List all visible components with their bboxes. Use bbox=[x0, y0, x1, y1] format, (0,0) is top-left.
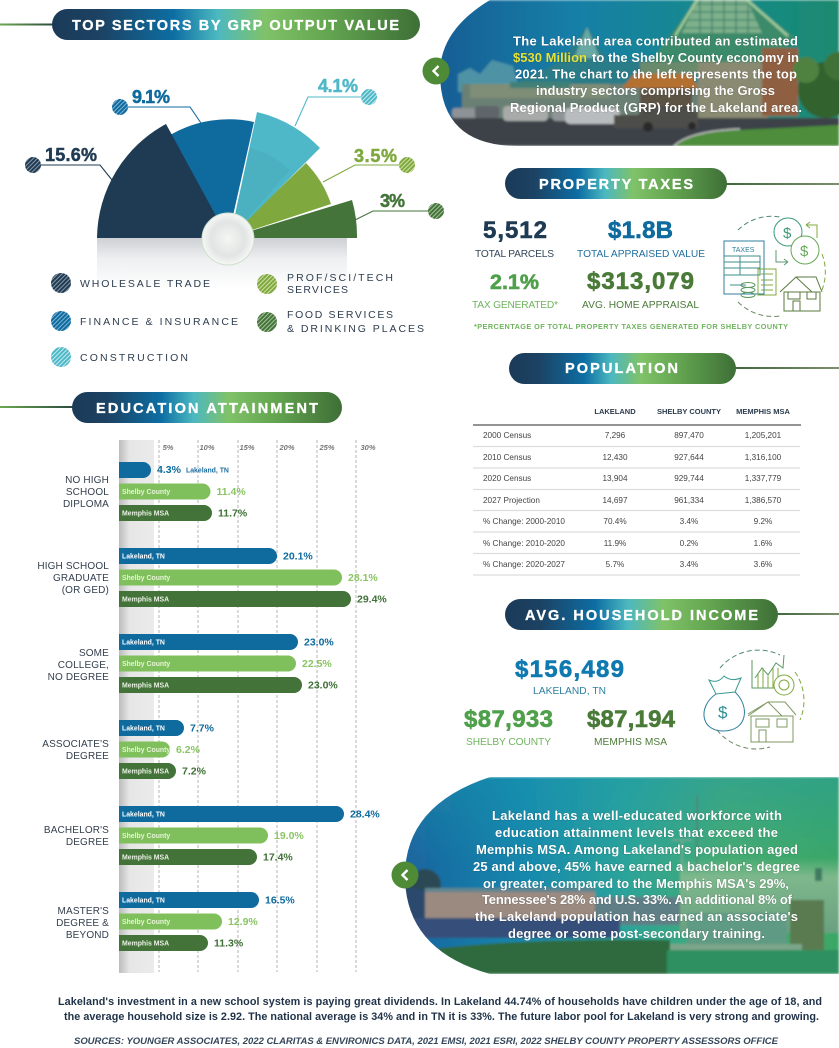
group: master's degree and beyond: 11.3% bbox=[214, 938, 244, 950]
icon: taxes document, coins and house: TAXES bbox=[732, 247, 755, 254]
row: 2020 census: 13,904 bbox=[602, 474, 628, 483]
icon: money bag, chart and house bbox=[704, 650, 804, 749]
row: 2000 census: 897,470 bbox=[674, 431, 704, 440]
group: master's degree and beyond: Lakeland, TN bbox=[122, 898, 165, 904]
driveway and grass bbox=[410, 918, 620, 938]
row: 2020 census: 929,744 bbox=[674, 474, 704, 483]
group: high school graduate: Memphis MSA bbox=[122, 596, 169, 604]
row: 2027 projection: 2027 Projection bbox=[483, 496, 540, 505]
row: change 2020-2027: 3.6% bbox=[754, 560, 772, 569]
group: master's degree and beyond bbox=[56, 892, 295, 951]
row: 2000 census: 7,296 bbox=[605, 431, 626, 440]
stat: Lakeland income: $156,489 bbox=[515, 656, 624, 683]
row: 2000 census bbox=[483, 431, 782, 440]
stat: Shelby County income: SHELBY COUNTY bbox=[466, 737, 551, 748]
value: 15.6% bbox=[25, 145, 97, 173]
group: no high school diploma: DIPLOMA bbox=[63, 499, 109, 510]
group: master's degree and beyond: Shelby County bbox=[122, 919, 170, 926]
heading: average household income bbox=[505, 599, 839, 630]
stat: Shelby County income bbox=[464, 706, 553, 748]
value: 3.5% bbox=[354, 146, 415, 173]
row: change 2010-2020: % Change: 2010-2020 bbox=[483, 539, 565, 548]
banner text: The Lakeland area contributed an estimated bbox=[513, 34, 798, 48]
sector: professional services bbox=[228, 163, 331, 238]
distant rooflines bbox=[458, 60, 520, 92]
icon: back chevron button bbox=[422, 58, 450, 84]
row: 2010 census: 2010 Census bbox=[483, 453, 531, 462]
legend: finance and insurance: FINANCE & INSURANCE bbox=[80, 316, 238, 328]
group: some college bbox=[48, 634, 338, 693]
row: 2027 projection: 14,697 bbox=[602, 496, 628, 505]
group: no high school diploma: NO HIGH bbox=[65, 475, 109, 486]
group: bachelor's degree: DEGREE bbox=[66, 837, 109, 848]
group: master's degree and beyond: MASTER'S bbox=[58, 906, 109, 917]
sources line: SOURCES: YOUNGER ASSOCIATES, 2022 CLARITAS & ENVIRONICS DATA, 2021 EMSI, 2021 ESRI, 2022 SHELBY COUNTY PROPERTY ASSESSORS OFFICE bbox=[74, 1036, 779, 1047]
group: some college: 23.0% bbox=[308, 680, 338, 692]
group: high school graduate: Shelby County bbox=[122, 575, 170, 582]
banner text: Tennessee's 28% and U.S. 33%. An additional 8% of bbox=[482, 892, 793, 907]
heading: top sectors by GRP output value: TOP SECTORS BY GRP OUTPUT VALUE bbox=[72, 18, 399, 34]
group: no high school diploma: Lakeland, TN bbox=[186, 468, 229, 474]
banner text: Memphis MSA. Among Lakeland's population aged bbox=[476, 842, 798, 857]
group: high school graduate: GRADUATE bbox=[53, 573, 109, 584]
legend: professional services: PROF/SCI/TECH bbox=[287, 272, 393, 284]
banner text bbox=[473, 808, 800, 941]
group: bachelor's degree: 19.0% bbox=[274, 830, 304, 842]
storefront strip bbox=[462, 84, 702, 120]
group: bachelor's degree: Shelby County bbox=[122, 833, 170, 840]
row: 2027 projection: 1,386,570 bbox=[745, 496, 782, 505]
sector: food services bbox=[228, 200, 357, 238]
group: bachelor's degree: BACHELOR'S bbox=[44, 825, 109, 836]
leader lines bbox=[33, 97, 436, 220]
group: no high school diploma: 4.3% bbox=[157, 464, 182, 476]
value: 4.1% bbox=[318, 76, 377, 105]
banner text: or greater, compared to the Memphis MSA's 29%, bbox=[483, 876, 789, 891]
group: associate's degree: 7.7% bbox=[190, 722, 215, 734]
row: change 2000-2010: 9.2% bbox=[754, 517, 772, 526]
stat: average home appraisal bbox=[582, 268, 699, 311]
legend: finance and insurance bbox=[51, 311, 238, 331]
row: 2020 census bbox=[483, 474, 782, 483]
value: 3.5%: 3.5% bbox=[354, 146, 397, 166]
group: associate's degree: DEGREE bbox=[66, 751, 109, 762]
heading: education attainment: EDUCATION ATTAINMENT bbox=[96, 401, 318, 417]
stat: Memphis MSA income: $87,194 bbox=[587, 706, 676, 733]
axis labels: 10% bbox=[199, 443, 215, 452]
row: change 2020-2027: 5.7% bbox=[606, 560, 624, 569]
row: 2010 census bbox=[483, 453, 782, 462]
icon: back chevron button bbox=[392, 862, 418, 888]
closing paragraph: Lakeland's investment in a new school system is paying great dividends. In Lakeland 44.74% of households have children under the age of 18, and bbox=[58, 996, 822, 1008]
legend bbox=[51, 272, 424, 367]
stat: total parcels: TOTAL PARCELS bbox=[475, 249, 554, 260]
brick sign bbox=[790, 900, 824, 950]
banner text: Regional Product (GRP) for the Lakeland area. bbox=[510, 100, 802, 115]
icon: taxes document, coins and house bbox=[724, 216, 825, 316]
group: high school graduate: 20.1% bbox=[283, 550, 313, 562]
radial sector chart bbox=[25, 76, 444, 290]
row: change 2010-2020 bbox=[483, 539, 772, 548]
axis labels: 15% bbox=[239, 443, 255, 452]
photo banner: education workforce bbox=[390, 777, 839, 974]
group: bachelor's degree: Lakeland, TN bbox=[122, 812, 165, 818]
row: change 2000-2010 bbox=[483, 517, 772, 526]
table column headers bbox=[594, 407, 790, 416]
group: associate's degree: 7.2% bbox=[182, 766, 207, 778]
stat: Lakeland income: LAKELAND, TN bbox=[533, 686, 606, 697]
axis labels: 25% bbox=[318, 443, 335, 452]
legend: food services: & DRINKING PLACES bbox=[287, 323, 424, 335]
sector: construction bbox=[230, 112, 320, 238]
group: some college: Memphis MSA bbox=[122, 682, 169, 690]
group: some college: NO DEGREE bbox=[48, 672, 109, 683]
sector: finance and insurance bbox=[170, 119, 254, 238]
axis labels: 30% bbox=[360, 443, 376, 452]
banner text: 2021. The chart to the left represents the top bbox=[515, 66, 797, 82]
banner text: Lakeland has a well-educated workforce with bbox=[492, 808, 782, 823]
value: 3% bbox=[380, 191, 444, 219]
stat: Memphis MSA income bbox=[587, 706, 676, 748]
group: no high school diploma bbox=[63, 462, 248, 521]
row: 2010 census: 1,316,100 bbox=[745, 453, 782, 462]
value: 15.6%: 15.6% bbox=[45, 145, 97, 165]
stat: tax generated: 2.1% bbox=[490, 270, 539, 294]
row: change 2020-2027: % Change: 2020-2027 bbox=[483, 560, 565, 569]
row: 2000 census: 1,205,201 bbox=[745, 431, 782, 440]
value: 9.1% bbox=[112, 87, 170, 115]
heading: property taxes: PROPERTY TAXES bbox=[539, 177, 693, 193]
asphalt and grass bbox=[430, 118, 839, 146]
group: some college: 23.0% bbox=[304, 636, 334, 648]
group: master's degree and beyond: 12.9% bbox=[228, 916, 258, 928]
flagpole and light post bbox=[696, 795, 698, 880]
stat: average home appraisal: AVG. HOME APPRAISAL bbox=[582, 300, 699, 311]
school building bbox=[425, 891, 595, 918]
row: 2020 census: 2020 Census bbox=[483, 474, 531, 483]
group: high school graduate: Lakeland, TN bbox=[122, 554, 165, 560]
photo banner: Lakeland economy bbox=[422, 0, 839, 146]
chart floor reflection bbox=[97, 238, 347, 290]
stat: Memphis MSA income: MEMPHIS MSA bbox=[594, 737, 667, 748]
axis labels bbox=[163, 443, 376, 452]
group: some college: 22.5% bbox=[302, 658, 332, 670]
group: bachelor's degree bbox=[44, 806, 380, 865]
trees at left bbox=[410, 868, 442, 892]
stats: household income bbox=[464, 656, 676, 748]
parked cars bbox=[452, 108, 476, 118]
group: master's degree and beyond: Memphis MSA bbox=[122, 940, 169, 948]
sector: wholesale trade bbox=[97, 124, 228, 238]
centre glass circle bbox=[202, 213, 254, 265]
row: 2010 census: 12,430 bbox=[602, 453, 628, 462]
group: high school graduate: 29.4% bbox=[357, 594, 387, 606]
table column headers: MEMPHIS MSA bbox=[736, 407, 790, 416]
heading: average household income: AVG. HOUSEHOLD INCOME bbox=[525, 608, 758, 624]
group: master's degree and beyond: BEYOND bbox=[66, 930, 109, 941]
stat: average home appraisal: $313,079 bbox=[587, 268, 694, 295]
group: associate's degree: Shelby County bbox=[122, 747, 170, 754]
banner text bbox=[510, 34, 802, 115]
legend: wholesale trade: WHOLESALE TRADE bbox=[80, 278, 210, 290]
stat: total appraised value bbox=[577, 217, 705, 260]
stats: property taxes bbox=[472, 217, 788, 331]
row: 2000 census: 2000 Census bbox=[483, 431, 531, 440]
stat: tax generated bbox=[472, 270, 558, 311]
value: 3%: 3% bbox=[380, 191, 405, 211]
banner text: $530 Million bbox=[513, 50, 587, 65]
heading: population bbox=[509, 353, 839, 384]
banner text: education attainment levels that exceed the bbox=[495, 825, 778, 840]
legend: food services bbox=[257, 309, 424, 335]
banner text: degree or some post-secondary training. bbox=[508, 926, 765, 941]
stat: total appraised value: TOTAL APPRAISED VALUE bbox=[577, 249, 705, 260]
group: no high school diploma: 11.7% bbox=[218, 508, 248, 520]
legend: food services: FOOD SERVICES bbox=[287, 309, 393, 321]
row: 2010 census: 927,644 bbox=[674, 453, 704, 462]
group: some college: SOME bbox=[79, 648, 109, 659]
group: high school graduate: HIGH SCHOOL bbox=[37, 561, 109, 572]
legend: wholesale trade bbox=[51, 273, 210, 293]
legend: construction bbox=[51, 347, 188, 367]
row: change 2010-2020: 1.6% bbox=[754, 539, 772, 548]
stat: tax generated: TAX GENERATED* bbox=[472, 300, 558, 311]
heading: population: POPULATION bbox=[565, 361, 678, 377]
heading: property taxes bbox=[505, 168, 839, 199]
row: change 2010-2020: 0.2% bbox=[680, 539, 698, 548]
banner text: to the Shelby County economy in bbox=[592, 50, 799, 65]
icon: taxes document, coins and house: $ bbox=[800, 243, 809, 260]
row: 2027 projection: 961,334 bbox=[674, 496, 704, 505]
group: no high school diploma: SCHOOL bbox=[66, 487, 109, 498]
row: 2020 census: 1,337,779 bbox=[745, 474, 782, 483]
banner text: industry sectors comprising the Gross bbox=[536, 83, 775, 98]
group: associate's degree: Lakeland, TN bbox=[122, 726, 165, 732]
group: master's degree and beyond: 16.5% bbox=[265, 894, 295, 906]
value: 9.1%: 9.1% bbox=[132, 87, 170, 107]
group: master's degree and beyond: DEGREE & bbox=[56, 918, 109, 929]
stat: total parcels bbox=[475, 217, 554, 260]
row: change 2000-2010: 70.4% bbox=[603, 517, 627, 526]
stat: Lakeland income bbox=[515, 656, 624, 697]
group: bachelor's degree: 28.4% bbox=[350, 808, 380, 820]
icon: money bag, chart and house: $ bbox=[718, 703, 728, 722]
stat: total parcels: 5,512 bbox=[483, 217, 547, 244]
legend: professional services bbox=[257, 272, 393, 296]
group: associate's degree bbox=[42, 720, 215, 779]
row: change 2020-2027: 3.4% bbox=[680, 560, 698, 569]
heading: top sectors by GRP output value bbox=[0, 9, 420, 40]
population table bbox=[473, 407, 801, 575]
axis labels: 20% bbox=[278, 443, 295, 452]
table column headers: LAKELAND bbox=[594, 407, 636, 416]
closing paragraph bbox=[58, 996, 822, 1023]
icon: taxes document, coins and house: $ bbox=[783, 225, 792, 242]
group: some college: Lakeland, TN bbox=[122, 640, 165, 646]
group: associate's degree: ASSOCIATE'S bbox=[42, 739, 109, 750]
group: some college: COLLEGE, bbox=[58, 660, 109, 671]
footnote: *PERCENTAGE OF TOTAL PROPERTY TAXES GENERATED FOR SHELBY COUNTY bbox=[474, 322, 788, 331]
row: 2027 projection bbox=[483, 496, 782, 505]
row: change 2020-2027 bbox=[483, 560, 772, 569]
tree bbox=[798, 62, 839, 118]
stat: Shelby County income: $87,933 bbox=[464, 706, 553, 733]
table column headers: SHELBY COUNTY bbox=[657, 407, 721, 416]
closing paragraph: the average household size is 2.92. The national average is 34% and in TN it is 33%. The future labor pool for Lakeland is very strong and growing. bbox=[64, 1011, 819, 1023]
storefront gable bbox=[650, 0, 795, 62]
row: change 2010-2020: 11.9% bbox=[604, 539, 626, 548]
group: associate's degree: Memphis MSA bbox=[122, 768, 169, 776]
chart band and gridlines bbox=[119, 440, 154, 973]
value: 4.1%: 4.1% bbox=[318, 76, 358, 96]
group: some college: Shelby County bbox=[122, 661, 170, 668]
heading: education attainment bbox=[0, 392, 342, 423]
group: high school graduate: (OR GED) bbox=[62, 585, 109, 596]
row: change 2000-2010: % Change: 2000-2010 bbox=[483, 517, 565, 526]
legend: construction: CONSTRUCTION bbox=[80, 352, 188, 364]
banner text: the Lakeland population has earned an associate's bbox=[475, 909, 798, 924]
group: associate's degree: 6.2% bbox=[176, 744, 201, 756]
education bar chart bbox=[37, 440, 387, 973]
axis labels: 5% bbox=[163, 443, 174, 452]
group: no high school diploma: Shelby County bbox=[122, 489, 170, 496]
group: no high school diploma: Memphis MSA bbox=[122, 510, 169, 518]
group: bachelor's degree: Memphis MSA bbox=[122, 854, 169, 862]
group: no high school diploma: 11.4% bbox=[216, 486, 246, 498]
stat: total appraised value: $1.8B bbox=[608, 217, 673, 244]
banner text: 25 and above, 45% have earned a bachelor's degree bbox=[473, 859, 800, 874]
legend: professional services: SERVICES bbox=[287, 284, 348, 296]
group: high school graduate: 28.1% bbox=[348, 572, 378, 584]
group: high school graduate bbox=[37, 548, 387, 607]
group: bachelor's degree: 17.4% bbox=[263, 852, 293, 864]
row: change 2000-2010: 3.4% bbox=[680, 517, 698, 526]
